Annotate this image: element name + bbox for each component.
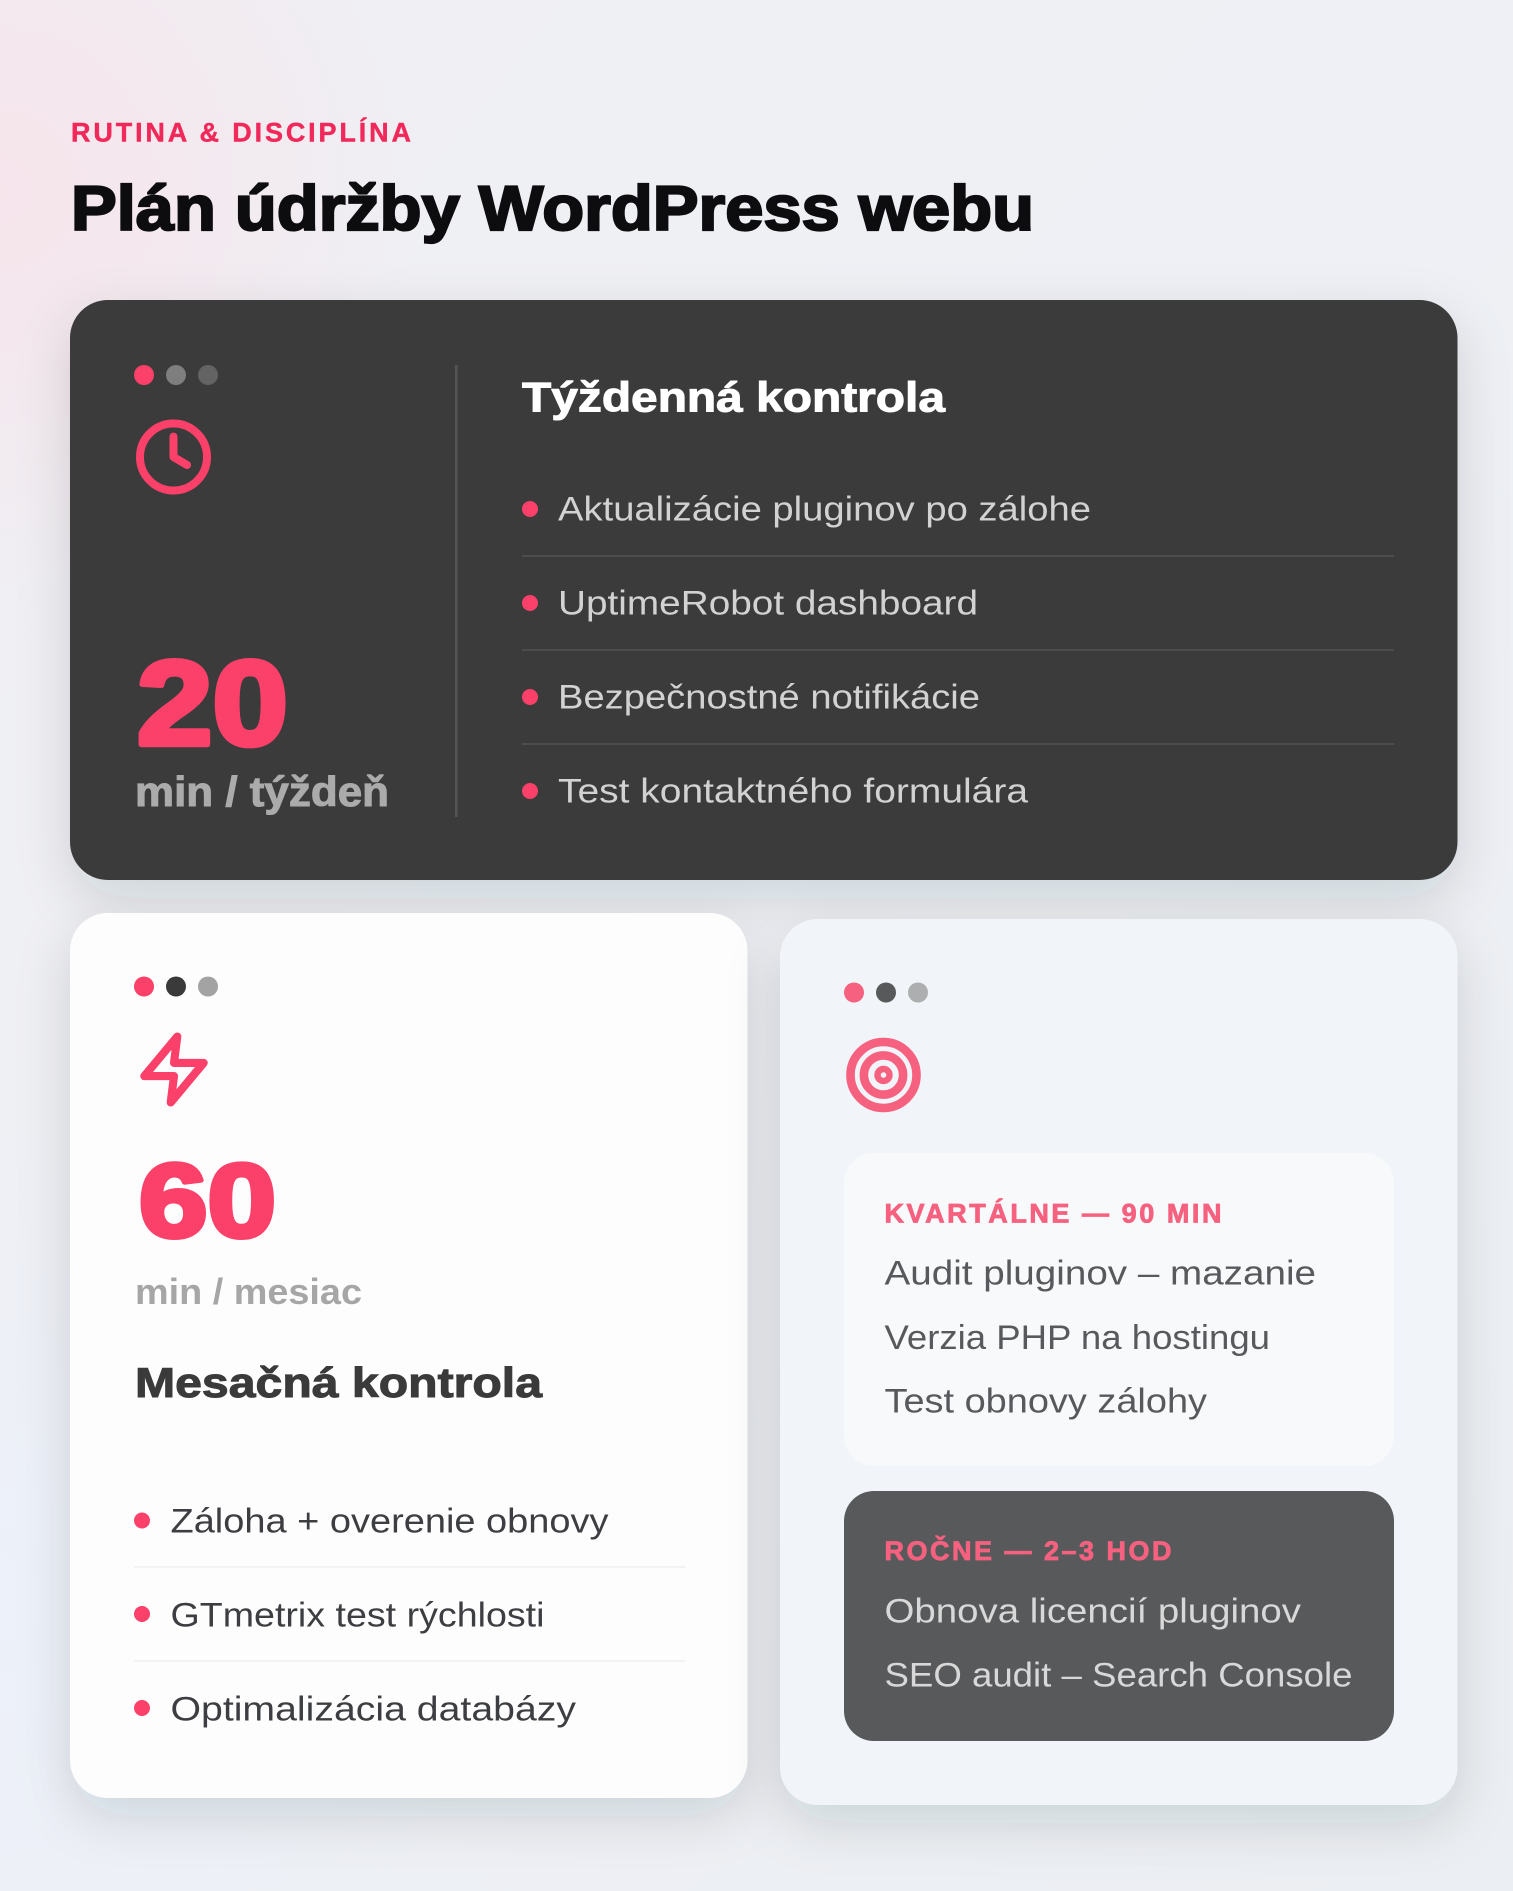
panel: weekly check [70,300,1458,880]
window dots [844,982,928,1002]
monthly checklist: GTmetrix test rýchlosti [170,1596,544,1634]
yearly tasks [884,1592,1352,1694]
weekly checklist: Test kontaktného formulára [558,772,1029,810]
header eyebrow: RUTINA & DISCIPLÍNA: RUTINA & DISCIPLÍNA [71,116,411,148]
title: Plán údržby WordPress webu [71,174,1034,244]
weekly checklist [522,490,1394,810]
yearly box [844,1491,1394,1741]
window dots [134,365,218,385]
quarterly label: KVARTÁLNE — 90 MIN [884,1198,1222,1228]
big number 60: 60 [139,1144,276,1260]
yearly label: ROČNE — 2–3 HOD [884,1535,1172,1566]
heading: Mesačná kontrola: Mesačná kontrola [135,1359,543,1406]
panel: quarterly and yearly [780,919,1458,1805]
quarterly tasks [884,1254,1316,1420]
window dots [134,976,218,996]
quarterly box [844,1153,1394,1466]
icon: clock [140,424,207,490]
monthly checklist: Optimalizácia databázy [170,1690,577,1728]
weekly checklist: Bezpečnostné notifikácie [558,678,980,716]
monthly checklist [134,1502,685,1728]
weekly checklist: UptimeRobot dashboard [558,584,978,622]
yearly tasks: Obnova licencií pluginov [884,1592,1302,1630]
icon: target [850,1042,916,1108]
big number 20: 20 [137,636,288,770]
quarterly tasks: Audit pluginov – mazanie [884,1254,1316,1292]
quarterly tasks: Test obnovy zálohy [884,1382,1208,1420]
yearly tasks: SEO audit – Search Console [884,1656,1352,1694]
heading: Týždenná kontrola: Týždenná kontrola [522,374,946,420]
monthly checklist: Záloha + overenie obnovy [170,1502,609,1540]
unit: min / mesiac: min / mesiac [135,1271,362,1312]
panel: monthly check [70,913,748,1798]
weekly checklist: Aktualizácie pluginov po zálohe [558,490,1091,528]
vertical divider [455,365,458,817]
quarterly tasks: Verzia PHP na hostingu [884,1319,1270,1357]
icon: lightning bolt [144,1036,204,1102]
unit: min / týždeň: min / týždeň [135,768,389,815]
